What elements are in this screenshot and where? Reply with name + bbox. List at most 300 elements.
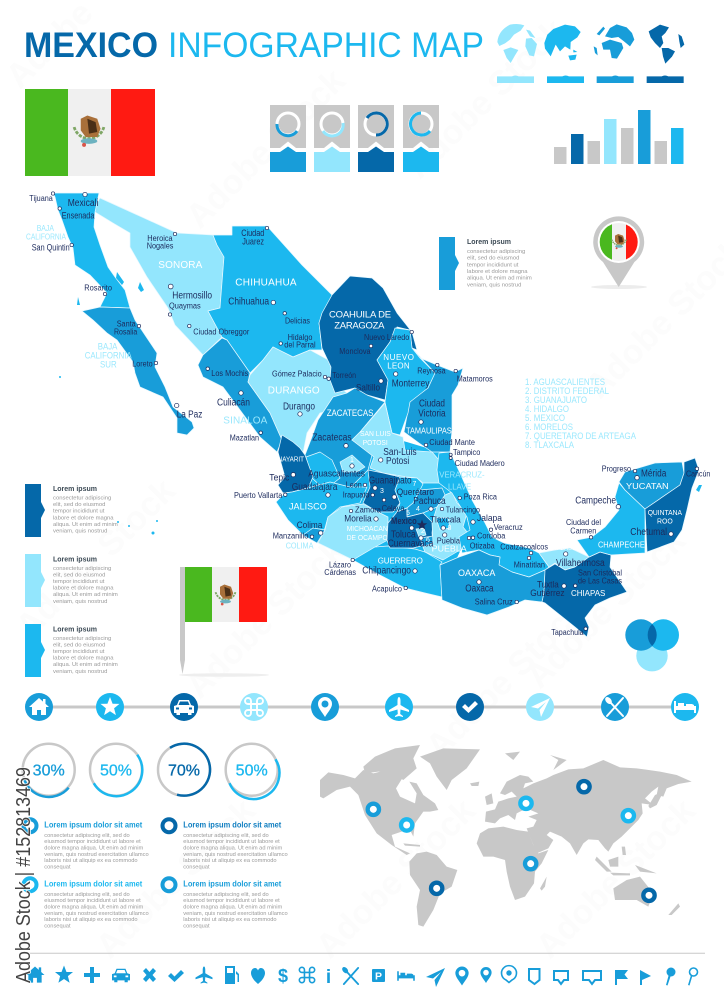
map pin with flag xyxy=(591,216,647,289)
state list: 4. HIDALGO xyxy=(525,404,569,415)
icon: check xyxy=(456,693,484,721)
state name labels: CALIFORNIA xyxy=(26,232,67,241)
text block: left 2: veniam, quis nostrud xyxy=(53,599,107,605)
city labels: Loreto xyxy=(132,360,153,369)
icon: lollipop pin xyxy=(666,968,676,986)
lorem block 2: eiusmod tempor incididunt ut labore et xyxy=(183,839,280,845)
state list: 5. MEXICO xyxy=(525,413,565,424)
city labels: Durango xyxy=(283,401,315,412)
watermark: Adobe Stock xyxy=(519,522,693,696)
watermark: Adobe Stock xyxy=(419,592,593,766)
icon: navigation xyxy=(426,968,445,987)
city labels: Mexico xyxy=(391,516,417,526)
city labels: Cordoba xyxy=(477,531,506,540)
state: Nuevo Leon xyxy=(377,328,435,435)
icon: cross xyxy=(143,968,156,982)
city labels: Chetumal xyxy=(630,527,667,538)
icon: square callout xyxy=(529,969,540,984)
lorem block 2: veniam, quis nostrud exercitation ullamco xyxy=(183,852,288,858)
state name labels: CALIFORNIA xyxy=(85,350,132,360)
city labels: Ciudad xyxy=(241,228,264,238)
lorem block 4: laboris nisi ut aliquip ex ea commodo xyxy=(183,917,277,923)
city labels: Monclova xyxy=(339,347,371,356)
watermark: Adobe Stock xyxy=(179,532,353,706)
state name labels: COLIMA xyxy=(286,541,314,550)
city labels: Pachuca xyxy=(413,496,446,507)
state: Veracruz xyxy=(437,452,549,577)
city labels: Mexicali xyxy=(68,198,98,209)
text block: left 3: veniam, quis nostrud xyxy=(53,669,107,675)
donut 70%: 70% xyxy=(168,762,200,780)
city labels: Tuxtla xyxy=(537,580,559,590)
city labels: Los Mochis xyxy=(211,369,248,378)
state name labels: LLAVE xyxy=(448,481,472,491)
state: Michoacan xyxy=(318,504,388,560)
state list: 1. AGUASCALIENTES xyxy=(525,377,605,388)
city labels: Santa xyxy=(117,320,136,329)
city labels xyxy=(29,194,710,637)
city labels: Hermosillo xyxy=(172,290,212,301)
icon: star xyxy=(55,966,73,983)
watermark: Adobe Stock xyxy=(179,62,353,236)
icon: fork and knife xyxy=(341,966,358,984)
lorem block 3 xyxy=(24,878,149,929)
icon: bed xyxy=(671,693,699,721)
state: Sinaloa xyxy=(198,338,282,452)
icon: wide callout xyxy=(583,971,601,984)
icon: small pin xyxy=(480,967,492,983)
lorem block 2: consectetur adipiscing elit, sed do xyxy=(183,833,269,839)
city labels: Progreso xyxy=(602,465,631,474)
lorem block 3: dolore magna aliqua. Ut enim ad minim xyxy=(44,904,144,910)
globe 1 xyxy=(497,24,537,83)
city labels: Victoria xyxy=(418,409,446,420)
lorem block 4: eiusmod tempor incididunt ut labore et xyxy=(183,898,280,904)
city labels: Tulancingo xyxy=(446,506,480,515)
lorem block 3: Lorem ipsum dolor sit amet xyxy=(44,880,143,889)
state name labels: SINALOA xyxy=(223,415,268,426)
flag on pole xyxy=(179,567,269,677)
city labels: Oaxaca xyxy=(465,584,494,595)
city labels: Ciudad xyxy=(419,399,445,410)
state list: 8. TLAXCALA xyxy=(525,440,575,451)
state name labels: VERACRUZ- xyxy=(439,469,485,479)
text block: left 2: Lorem ipsum xyxy=(53,556,97,563)
icon: command xyxy=(299,967,315,983)
city labels: Coatzacoalcos xyxy=(500,542,548,551)
city labels: San Quintin xyxy=(32,243,70,253)
icon: command xyxy=(240,693,268,721)
panel 2 xyxy=(314,105,350,172)
state: Zacatecas xyxy=(305,388,385,490)
city labels: Celaya xyxy=(382,504,405,513)
icon: plus xyxy=(84,967,100,983)
text block: top right: labore et dolore magna xyxy=(467,269,528,275)
text block: left 3: labore et dolore magna xyxy=(53,656,114,662)
state: Tamaulipas xyxy=(404,348,463,452)
city labels: Colima xyxy=(297,520,322,530)
city labels: Acapulco xyxy=(372,585,402,594)
city labels: Chihuahua xyxy=(228,297,269,308)
city dots xyxy=(51,192,699,630)
state name labels: MICHOACAN xyxy=(347,524,388,533)
state: Nayarit xyxy=(278,435,313,493)
city labels: Tlaxcala xyxy=(430,514,461,524)
location markers xyxy=(368,781,655,901)
city labels: Tijuana xyxy=(29,194,53,203)
city labels: Lázaro xyxy=(329,560,351,569)
state name labels: TABASCO xyxy=(554,546,581,552)
state: Puebla xyxy=(423,492,472,560)
title xyxy=(24,26,484,65)
city labels: Monterrey xyxy=(392,379,429,390)
state: Tabasco xyxy=(539,548,589,570)
state list: 2. DISTRITO FEDERAL xyxy=(525,386,609,397)
city labels: Zamora xyxy=(355,506,382,515)
city labels: Tampico xyxy=(453,448,481,457)
capital star xyxy=(417,520,427,529)
icon: location pin xyxy=(311,693,339,721)
lorem block 3: consequat xyxy=(44,923,71,929)
state name labels: DE OCAMPO xyxy=(347,533,388,542)
bar chart xyxy=(554,110,684,164)
donut 30%: 30% xyxy=(33,762,65,780)
city labels: Morelia xyxy=(344,514,372,524)
city labels: de Las Casas xyxy=(578,576,622,585)
donut 30% xyxy=(23,744,75,797)
city labels: Nuevo Laredo xyxy=(364,333,410,342)
city labels: Mérida xyxy=(641,469,667,480)
city labels: Tapachula xyxy=(551,628,584,637)
state: Campeche xyxy=(577,483,645,557)
state name labels: CHAMPECHE xyxy=(598,541,645,550)
text block: left 3 xyxy=(25,624,118,677)
bottom icon row xyxy=(26,966,698,988)
donut 70% xyxy=(158,744,210,796)
text block: left 3: Lorem ipsum xyxy=(53,626,97,633)
city labels: San Cristóbal xyxy=(578,569,622,578)
text block: top right: veniam, quis nostrud xyxy=(467,282,521,288)
city labels: Minatitlan xyxy=(514,560,545,569)
city labels: Otizaba xyxy=(470,541,495,550)
state name labels: YUCATAN xyxy=(626,481,669,491)
city labels: Juarez xyxy=(242,236,264,246)
donut panels xyxy=(270,105,439,172)
text block: left 2: tempor incididunt ut xyxy=(53,579,105,585)
state name labels: OAXACA xyxy=(458,568,496,578)
text block: left 1: veniam, quis nostrud xyxy=(53,528,107,534)
state: Guanajuato xyxy=(363,470,400,512)
city labels: Nogales xyxy=(147,242,173,251)
city labels: del Parral xyxy=(284,341,316,350)
icon: bed xyxy=(397,971,415,981)
lorem block 3: eiusmod tempor incididunt ut labore et xyxy=(44,898,141,904)
text block: left 3: consectetur adipiscing xyxy=(53,636,111,642)
icon: navigation xyxy=(526,693,554,721)
lorem block 1: veniam, quis nostrud exercitation ullamco xyxy=(44,852,149,858)
lorem block 1: dolore magna aliqua. Ut enim ad minim xyxy=(44,846,144,852)
state name labels: ZACATECAS xyxy=(327,408,373,418)
lorem block 3: veniam, quis nostrud exercitation ullamco xyxy=(44,911,149,917)
state name labels: 5 xyxy=(406,510,410,517)
globe 4 xyxy=(647,25,684,83)
city labels: Delicias xyxy=(285,316,310,325)
central base xyxy=(285,440,470,590)
lorem block 1: consequat xyxy=(44,864,71,870)
icon: pennant xyxy=(640,970,651,985)
state name labels: BAJA xyxy=(98,341,117,351)
bottom rule xyxy=(25,952,705,954)
city labels: Hidalgo xyxy=(288,333,313,342)
icon: magnifier xyxy=(688,968,698,986)
watermark: Adobe Stock xyxy=(399,12,573,186)
state: Guerrero xyxy=(353,546,442,597)
state name labels: PUEBLA xyxy=(432,545,467,554)
state: Chiapas xyxy=(542,552,627,637)
lorem block 4: dolore magna aliqua. Ut enim ad minim xyxy=(183,904,283,910)
donut 50%: 50% xyxy=(100,762,132,780)
state name labels: QUINTANA xyxy=(648,508,682,517)
globe 2 xyxy=(544,25,584,83)
lorem block 1: laboris nisi ut aliquip ex ea commodo xyxy=(44,858,138,864)
panel 4 xyxy=(403,105,439,172)
city labels: Jalapa xyxy=(477,513,502,523)
state name labels: 2 xyxy=(421,528,425,535)
icon: check xyxy=(168,970,184,982)
state name labels: DURANGO xyxy=(268,385,321,396)
state name labels: CHIHUAHUA xyxy=(235,277,298,288)
state: Queretaro xyxy=(395,477,423,512)
icon: flag xyxy=(615,970,628,985)
icon: parking: P xyxy=(375,970,382,982)
state name labels: SONORA xyxy=(158,260,203,271)
city labels: Cancún xyxy=(686,470,710,479)
state name labels: SAN LUIS xyxy=(360,429,391,438)
lorem block 1: consectetur adipiscing elit, sed do xyxy=(44,833,130,839)
city labels: La Paz xyxy=(177,409,202,420)
lorem block 4: Lorem ipsum dolor sit amet xyxy=(183,880,282,889)
lorem block 3: laboris nisi ut aliquip ex ea commodo xyxy=(44,917,138,923)
state name labels: CHIAPAS xyxy=(571,589,605,598)
title: INFOGRAPHIC MAP xyxy=(168,26,484,65)
state: Hidalgo xyxy=(407,488,445,517)
icon: callout xyxy=(554,971,568,984)
city labels: Torreón xyxy=(332,371,356,380)
donut 50%: 50% xyxy=(236,762,268,780)
panel 1 xyxy=(270,105,306,172)
city labels: Gómez Palacio xyxy=(272,370,322,379)
text block: left 1: tempor incididunt ut xyxy=(53,509,105,515)
state name labels: 8 xyxy=(448,525,452,532)
watermark: Adobe Stock xyxy=(9,472,183,646)
lorem block 2: dolore magna aliqua. Ut enim ad minim xyxy=(183,846,283,852)
city labels: Potosi xyxy=(386,456,409,467)
state name labels: 1 xyxy=(350,457,354,464)
icon: home xyxy=(25,693,53,721)
lorem block 2: Lorem ipsum dolor sit amet xyxy=(183,821,282,830)
state name labels: POTOSI xyxy=(363,438,388,447)
city labels: Saltillo xyxy=(356,383,380,393)
lorem block 4: consequat xyxy=(183,923,210,929)
lorem block 1: Lorem ipsum dolor sit amet xyxy=(44,821,143,830)
city labels: Puerto Vallarta xyxy=(234,491,283,500)
state: Sonora xyxy=(93,198,224,355)
text block: left 2 xyxy=(25,554,118,607)
text block: left 1: elit, sed do eiusmod xyxy=(53,502,105,508)
text block: top right: Lorem ipsum xyxy=(467,239,511,246)
state name labels: NUEVO xyxy=(383,353,415,362)
state: Morelos xyxy=(420,536,433,548)
state name labels: 6 xyxy=(426,537,430,544)
text block: left 2: aliqua. Ut enim ad minim xyxy=(53,592,118,598)
lorem block 4: consectetur adipiscing elit, sed do xyxy=(183,892,269,898)
city labels: Querétaro xyxy=(397,487,434,497)
lorem block 2 xyxy=(162,819,288,870)
city labels: Cárdenas xyxy=(324,568,356,577)
icon: target pin xyxy=(502,966,516,982)
city labels: Ensenada xyxy=(62,210,94,220)
lorem block 1 xyxy=(24,819,149,870)
text block: left 1 xyxy=(25,484,118,537)
state: Baja California xyxy=(53,193,130,308)
state name labels: ROO xyxy=(657,516,673,525)
map of Mexico xyxy=(53,193,702,637)
state name labels: SUR xyxy=(100,359,117,369)
state: Jalisco xyxy=(276,482,367,543)
city labels: Campeche xyxy=(575,495,616,506)
city labels: Leon xyxy=(346,481,362,490)
state: Tlaxcala xyxy=(436,518,450,530)
city labels: Toluca xyxy=(391,530,416,541)
icon: airplane xyxy=(196,966,212,984)
icon: star xyxy=(96,693,124,721)
state: Distrito Federal xyxy=(416,528,426,537)
text block: left 1: consectetur adipiscing xyxy=(53,496,111,502)
islands xyxy=(59,272,702,534)
city labels: Matamoros xyxy=(457,375,493,384)
text block: top right: aliqua. Ut enim ad minim xyxy=(467,276,532,282)
city labels: Mazatlan xyxy=(230,434,259,443)
lorem block 4: veniam, quis nostrud exercitation ullamco xyxy=(183,911,288,917)
globes row xyxy=(497,24,684,83)
text block: left 2: consectetur adipiscing xyxy=(53,566,111,572)
state: Baja California Sur xyxy=(82,307,194,435)
text icon: info: i xyxy=(326,967,331,988)
city labels: Ciudad Obreggor xyxy=(193,327,250,336)
state: Quintana Roo xyxy=(645,458,699,552)
city labels: Gutiérrez xyxy=(530,588,565,598)
title: MEXICO xyxy=(24,26,158,65)
city labels: Ciudad Madero xyxy=(455,459,505,468)
state: Colima xyxy=(303,528,325,543)
state: Coahuila xyxy=(319,276,417,400)
state list xyxy=(525,377,637,451)
watermark: Adobe Stock xyxy=(529,792,703,966)
state name labels: 4 xyxy=(416,506,420,513)
state name labels: ZARAGOZA xyxy=(334,320,385,331)
state name labels xyxy=(26,224,682,598)
stock id text: Adobe Stock | #152813469 xyxy=(13,767,35,983)
state name labels: COAHUILA DE xyxy=(329,309,392,320)
state: Yucatan xyxy=(619,462,684,509)
state: Mexico xyxy=(387,508,433,548)
donut 50% xyxy=(90,744,142,796)
panel 3 xyxy=(358,105,394,172)
city labels: Carmen xyxy=(570,526,596,535)
text block: left 2: elit, sed do eiusmod xyxy=(53,572,105,578)
city labels: Tepic xyxy=(269,473,290,483)
city labels: Chilpancingo xyxy=(362,565,411,576)
lorem block 2: consequat xyxy=(183,864,210,870)
icon: pin xyxy=(455,966,469,986)
continents xyxy=(320,745,692,927)
text block: left 2: labore et dolore magna xyxy=(53,586,114,592)
lorem block 1: eiusmod tempor incididunt ut labore et xyxy=(44,839,141,845)
watermark: Adobe Stock xyxy=(89,792,263,966)
icon: parking xyxy=(372,969,385,982)
city labels: Quaymas xyxy=(169,302,201,311)
text block: left 3: tempor incididunt ut xyxy=(53,649,105,655)
state name labels: TAMAULIPAS xyxy=(406,426,452,435)
text block: top right: consectetur adipiscing xyxy=(467,249,525,255)
text block: left 1: labore et dolore magna xyxy=(53,515,114,521)
venn diagram xyxy=(625,619,679,671)
city labels: Villahermosa xyxy=(556,558,605,569)
state name labels: BAJA xyxy=(37,224,55,233)
city labels: Puebla xyxy=(437,536,461,545)
icon: fuel pump xyxy=(225,966,239,984)
state: San Luis Potosi xyxy=(352,403,441,483)
city labels: Reynosa xyxy=(417,366,446,375)
icon: fork and knife xyxy=(601,693,629,721)
icon: airplane xyxy=(385,693,413,721)
city labels: Manzanillo xyxy=(273,531,309,540)
text block: top right: tempor incididunt ut xyxy=(467,262,519,268)
state: Aguascalientes area xyxy=(306,452,340,490)
percentage donuts xyxy=(23,744,279,799)
city labels: Poza Rica xyxy=(464,492,497,501)
text block: top right: elit, sed do eiusmod xyxy=(467,256,519,262)
state name labels: JALISCO xyxy=(289,501,327,511)
state name labels: 7 xyxy=(412,481,416,488)
world map xyxy=(320,745,692,927)
city labels: Cuernavaca xyxy=(388,539,434,550)
lorem block 3: consectetur adipiscing elit, sed do xyxy=(44,892,130,898)
state name labels: LEON xyxy=(387,361,411,370)
city labels: Culiacán xyxy=(217,397,250,408)
city labels: San-Luis xyxy=(383,447,417,458)
state list: 3. GUANAJUATO xyxy=(525,395,587,406)
state name labels: 3 xyxy=(380,488,384,495)
lorem block 4 xyxy=(162,878,288,929)
state list: 6. MORELOS xyxy=(525,422,573,433)
state name labels: NAYARIT xyxy=(278,457,305,464)
text icon: dollar: $ xyxy=(278,966,288,986)
icon: home xyxy=(26,966,44,983)
text block: top right xyxy=(439,237,532,290)
city labels: Salina Cruz xyxy=(475,597,513,606)
city labels: Guadalajara xyxy=(292,482,338,493)
text block: left 3: elit, sed do eiusmod xyxy=(53,642,105,648)
city labels: Ciudad del xyxy=(566,518,601,527)
lorem block 2: laboris nisi ut aliquip ex ea commodo xyxy=(183,858,277,864)
city labels: Aguascalientes xyxy=(308,469,365,479)
state list: 7. QUERETARO DE ARTEAGA xyxy=(525,431,637,442)
city labels: Zacatecas xyxy=(312,433,352,444)
city labels: Rosarito xyxy=(84,283,113,292)
state name labels: GUERRERO xyxy=(378,556,423,565)
donut 50% xyxy=(226,744,279,799)
